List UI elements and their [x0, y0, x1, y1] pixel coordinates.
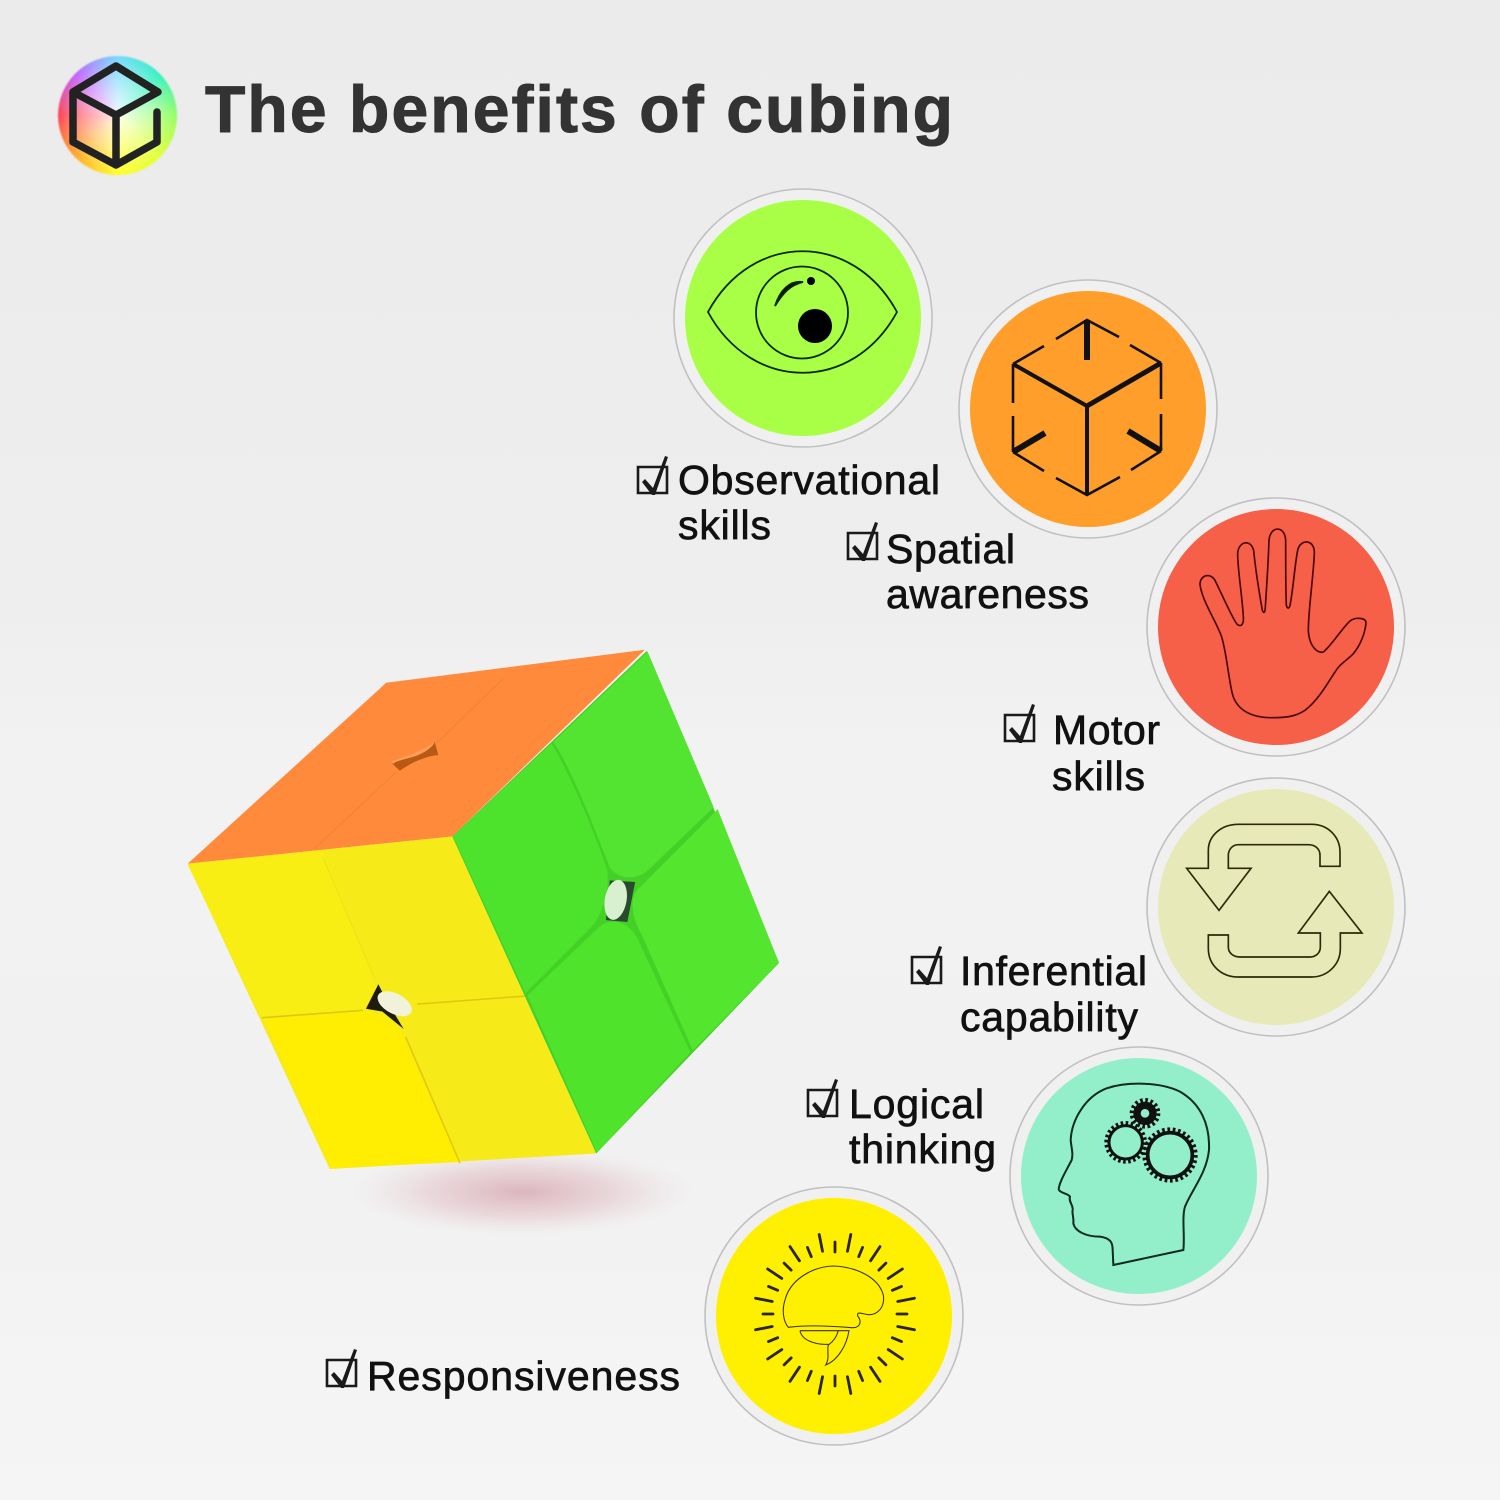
label: motor skills — [1005, 704, 1160, 799]
icon: rainbow logo disc — [58, 56, 177, 175]
icon: hand — [1200, 529, 1366, 718]
label: logical thinking — [808, 1079, 996, 1172]
label: observational skills — [638, 456, 940, 548]
label: observational skills: skills — [678, 502, 771, 548]
cube top face — [188, 650, 645, 864]
panel: motor skills badge — [1147, 498, 1405, 756]
panel: spatial awareness badge — [959, 280, 1217, 538]
label: spatial awareness — [848, 522, 1089, 617]
label: responsiveness: Responsiveness — [367, 1353, 680, 1399]
icon: sun rays — [756, 1235, 914, 1393]
icon: brain — [783, 1266, 884, 1365]
cube shadow — [352, 1148, 692, 1236]
label: motor skills: skills — [1052, 753, 1145, 799]
label: spatial awareness: Spatial — [886, 526, 1015, 572]
icon: logo cube outline — [73, 66, 158, 165]
label: inferential capability — [912, 946, 1147, 1040]
panel: responsiveness badge — [705, 1187, 963, 1445]
icon: dashed cube — [1013, 320, 1161, 495]
label: spatial awareness: awareness — [886, 571, 1089, 617]
core ball right — [601, 878, 635, 922]
panel: observational skills badge — [674, 189, 932, 447]
panel: inferential capability badge — [1147, 778, 1405, 1036]
icon: eye — [708, 251, 897, 373]
icon: head with gears — [1059, 1084, 1209, 1265]
title: The benefits of cubing — [205, 72, 953, 146]
core ball left — [366, 984, 416, 1029]
label: inferential capability: capability — [960, 994, 1138, 1040]
label: observational skills: Observational — [678, 457, 940, 503]
icon: cycle arrows — [1187, 824, 1362, 977]
label: motor skills: Motor — [1053, 707, 1160, 753]
cube right face — [452, 651, 779, 1153]
panel: logical thinking badge — [1010, 1047, 1268, 1305]
label: logical thinking: thinking — [849, 1126, 996, 1172]
illustration: 2x2 speed cube — [188, 650, 779, 1169]
top face seam and slot — [314, 679, 503, 849]
label: inferential capability: Inferential — [960, 948, 1147, 994]
label: logical thinking: Logical — [849, 1081, 984, 1127]
cube left face — [188, 836, 596, 1169]
